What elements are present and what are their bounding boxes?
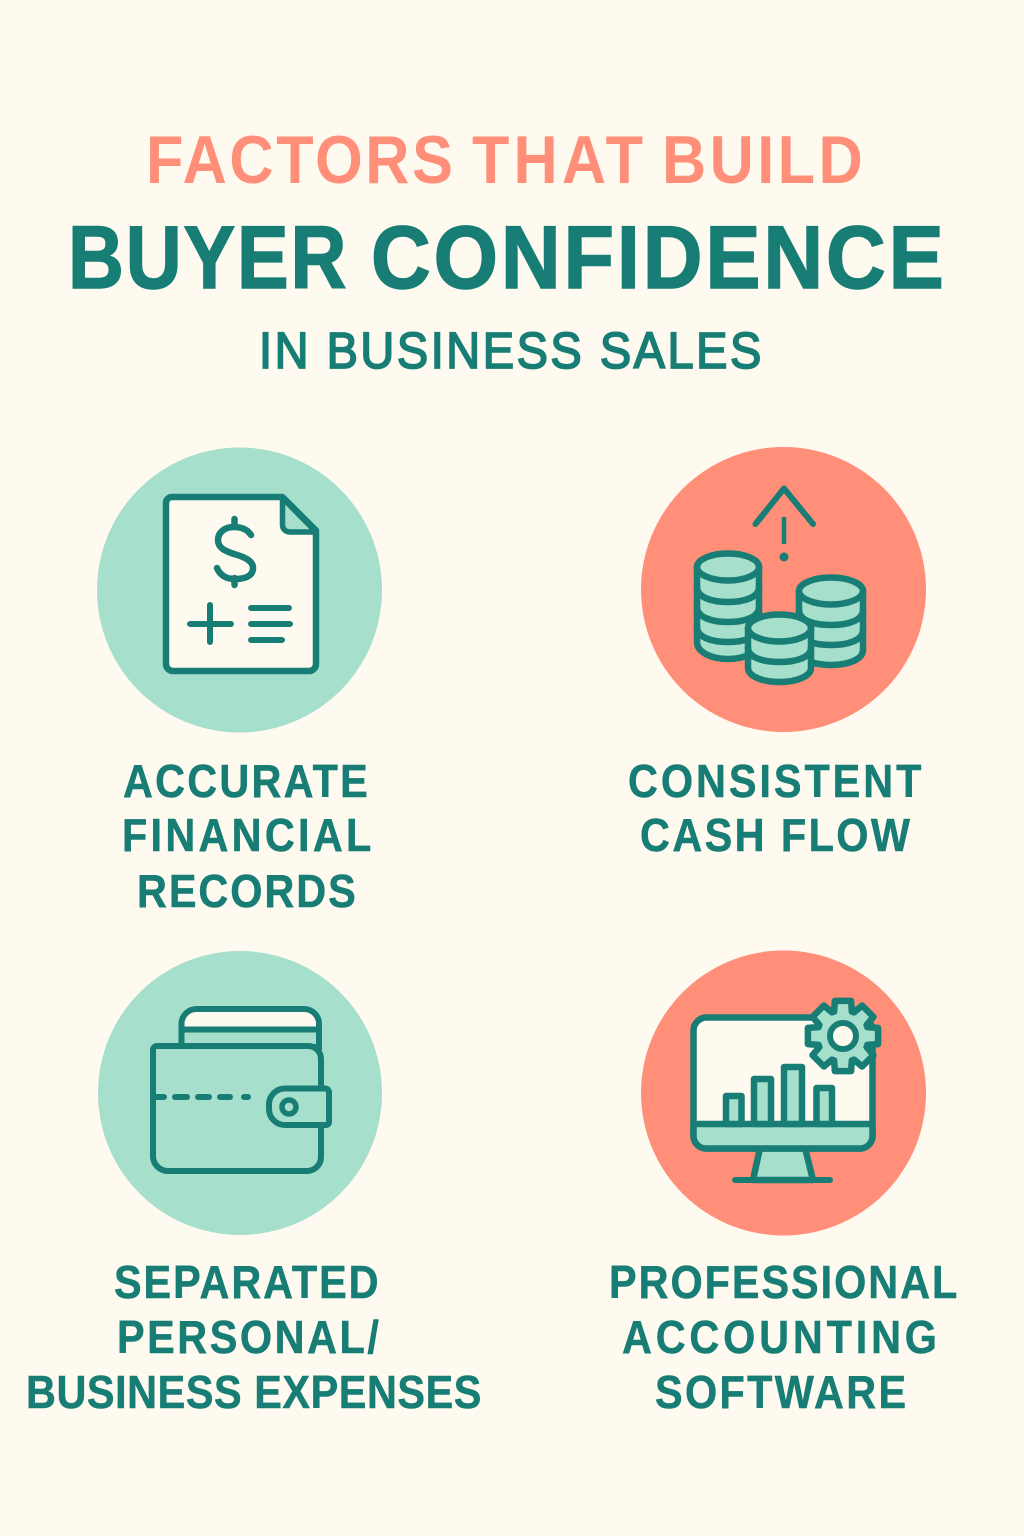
- icon: rising arrow: [756, 488, 813, 562]
- label: accurate financial records: FINANCIAL: [122, 810, 371, 862]
- icon: front coin stack: [748, 614, 811, 682]
- circle background coral: [641, 447, 926, 732]
- bar chart: [726, 1067, 832, 1124]
- label: accurate financial records: ACCURATE: [123, 756, 368, 808]
- panel: accurate financial records: [97, 448, 382, 918]
- label: separated personal/business expenses: PERSONAL/: [117, 1312, 379, 1364]
- circle background mint: [97, 448, 382, 732]
- panel: professional accounting software: [609, 950, 957, 1419]
- label: professional accounting software: SOFTWARE: [655, 1367, 906, 1419]
- gear: [808, 1001, 878, 1071]
- monitor body: [694, 1018, 872, 1148]
- label: accurate financial records: [122, 756, 371, 918]
- heading line: factors that build: [146, 121, 863, 198]
- label: accurate financial records: RECORDS: [137, 866, 356, 918]
- heading line: buyer confidence: CONFIDENCE: [371, 208, 944, 308]
- heading line: factors that build: FACTORS: [146, 121, 453, 198]
- monitor stand: [753, 1148, 813, 1180]
- circle background coral: [641, 950, 926, 1236]
- circle background mint: [98, 951, 382, 1235]
- icon: right coin stack: [799, 578, 863, 665]
- subheading: in business sales: IN BUSINESS SALES: [259, 323, 761, 379]
- label: professional accounting software: PROFESSIONAL: [609, 1257, 957, 1309]
- panel: consistent cash flow: [628, 447, 926, 862]
- label: separated personal/business expenses: [26, 1257, 481, 1419]
- label: consistent cash flow: [628, 756, 922, 862]
- heading line: buyer confidence: BUYER: [68, 207, 346, 307]
- heading line: factors that build: BUILD: [662, 121, 863, 198]
- icon: left coin stack: [697, 554, 759, 659]
- label: professional accounting software: [609, 1257, 957, 1419]
- label: consistent cash flow: CONSISTENT: [628, 756, 922, 808]
- heading line: factors that build: THAT: [472, 121, 643, 198]
- title block: [68, 121, 944, 379]
- icon: wallet: [153, 1009, 329, 1171]
- icon: financial document: [166, 497, 316, 671]
- label: separated personal/business expenses: SEPARATED: [114, 1257, 379, 1309]
- label: separated personal/business expenses: BUSINESS EXPENSES: [26, 1367, 481, 1419]
- icon: monitor with bar chart and gear: [694, 1001, 878, 1180]
- monitor base line: [735, 1177, 830, 1183]
- monitor lower panel: [694, 1124, 872, 1148]
- heading line: buyer confidence: [68, 207, 944, 308]
- label: professional accounting software: ACCOUNTING: [622, 1312, 937, 1364]
- panel: separated personal and business expenses: [26, 951, 481, 1419]
- label: consistent cash flow: CASH FLOW: [640, 810, 911, 862]
